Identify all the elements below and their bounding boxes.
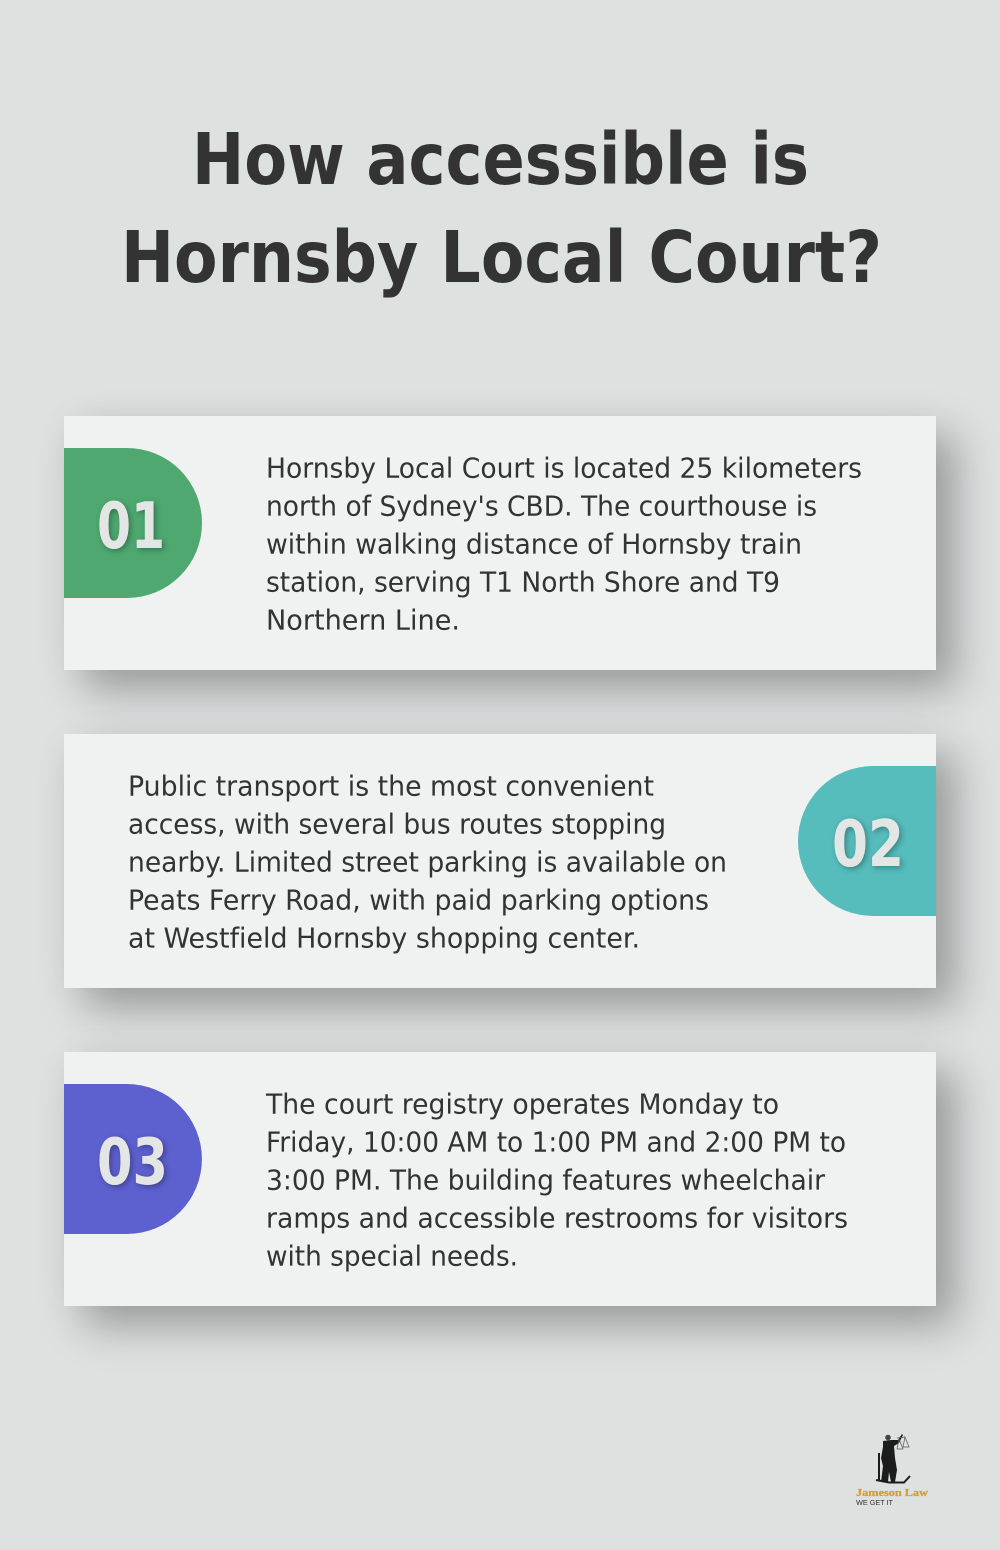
text: card 1 body: Hornsby Local Court is located 25 kilometers <box>266 452 862 484</box>
panel: card 2 <box>64 734 936 988</box>
text: card 1 body: station, serving T1 North Shore and T9 <box>266 566 780 598</box>
badge: 03: 03 <box>97 1126 168 1200</box>
badge: 03 <box>64 1084 202 1234</box>
text: card 1 body <box>266 452 862 636</box>
text: card 3 body: with special needs. <box>266 1240 518 1272</box>
text: card 2 body: Peats Ferry Road, with paid parking options <box>128 884 709 916</box>
text: card 1 body: Northern Line. <box>266 604 460 636</box>
badge: 01: 01 <box>97 490 165 564</box>
text: card 3 body: ramps and accessible restrooms for visitors <box>266 1202 848 1234</box>
text: card 1 body: north of Sydney's CBD. The courthouse is <box>266 490 817 522</box>
text: card 2 body: at Westfield Hornsby shopping center. <box>128 922 640 954</box>
title <box>121 118 882 299</box>
text: card 3 body: Friday, 10:00 AM to 1:00 PM and 2:00 PM to <box>266 1126 846 1158</box>
text: card 2 body: Public transport is the most convenient <box>128 770 654 802</box>
panel: card 3 <box>64 1052 936 1306</box>
text: card 2 body: nearby. Limited street parking is available on <box>128 846 727 878</box>
text: card 1 body: within walking distance of Hornsby train <box>266 528 802 560</box>
text: card 3 body: The court registry operates Monday to <box>265 1088 779 1120</box>
logo: Jameson Law <box>856 1434 928 1507</box>
text: card 3 body <box>265 1088 848 1272</box>
badge: 02: 02 <box>832 808 904 882</box>
text: card 2 body: access, with several bus routes stopping <box>128 808 666 840</box>
text: card 3 body: 3:00 PM. The building features wheelchair <box>266 1164 826 1196</box>
text: card 2 body <box>128 770 727 954</box>
badge: 02 <box>798 766 936 916</box>
badge: 01 <box>64 448 202 598</box>
title: Hornsby Local Court? <box>121 216 882 299</box>
icon: lady justice <box>876 1434 910 1482</box>
title: How accessible is <box>192 118 809 201</box>
logo: Jameson Law: WE GET IT <box>856 1500 894 1507</box>
logo: Jameson Law: Jameson Law <box>856 1487 928 1499</box>
panel: card 1 <box>64 416 936 670</box>
